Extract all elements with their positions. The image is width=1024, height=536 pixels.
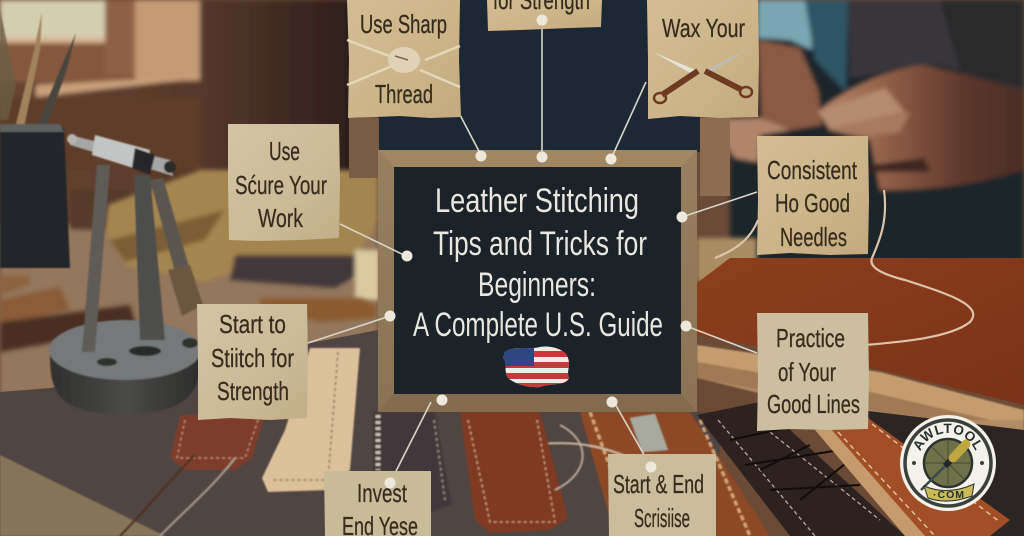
- note: consistent good needles: Consistent: [767, 155, 858, 185]
- note: practice good lines: Good Lines: [767, 389, 860, 419]
- note: start and end: Start & End: [613, 469, 704, 499]
- top right: craftsman apron, shirt and hands: [710, 0, 1024, 262]
- note: wax your: [647, 0, 759, 119]
- note: secure your work: Use: [269, 136, 300, 166]
- orange leather strip with spool: [532, 412, 770, 536]
- icon: US flag: [503, 346, 569, 388]
- note: secure your work: [228, 124, 340, 241]
- note: use sharp thread: [347, 0, 461, 118]
- pencil cup with pencils: [0, 10, 76, 268]
- note: consistent good needles: [757, 136, 869, 255]
- note: use sharp thread: Thread: [375, 79, 433, 109]
- board title: A Complete U.S. Guide: [413, 306, 663, 344]
- connector dots: [384, 14, 692, 488]
- note: start to stitch for strength: Stiitch for: [211, 343, 294, 373]
- note: invest end yese: Invest: [357, 478, 408, 508]
- blackboard surface: [394, 167, 681, 394]
- note: practice good lines: of Your: [778, 357, 836, 387]
- note: start to stitch for strength: Strength: [217, 376, 289, 406]
- logo: awltool badge: [900, 415, 996, 511]
- note: practice good lines: Practice: [776, 323, 845, 353]
- wood block on right: [697, 238, 757, 282]
- brown leather tag strip: [460, 412, 583, 533]
- gloves on table: [105, 170, 379, 300]
- note: secure your work: Work: [258, 203, 304, 233]
- large brown leather hide: [697, 258, 1024, 405]
- note: consistent good needles: Ho Good: [775, 188, 850, 218]
- chalkboard with title: [378, 150, 697, 412]
- wooden tabletop corner: [0, 455, 165, 536]
- waxed thread cord: [715, 190, 973, 345]
- note: secure your work: Sćure Your: [235, 170, 327, 200]
- note: start and end: [608, 454, 716, 536]
- wood pieces and handle: [0, 275, 376, 352]
- note: practice good lines: [757, 313, 869, 431]
- note: wax your: Wax Your: [662, 13, 745, 43]
- icon: awl: [921, 444, 966, 490]
- icon: scissors: [653, 47, 752, 103]
- wooden frame: [378, 150, 697, 412]
- background: blurred wall and window: [0, 0, 378, 415]
- note: start to stitch for strength: [197, 304, 308, 420]
- note: start and end: Scrisiise: [634, 503, 690, 533]
- brown leather tag with cords: [120, 415, 265, 536]
- note: use sharp thread: Use Sharp: [360, 9, 447, 39]
- note: for strength: [487, 0, 602, 31]
- logo: awltool badge: AWLTOOL: [914, 424, 981, 451]
- chalkboard back panel: [349, 0, 730, 196]
- right hand: [818, 65, 1024, 190]
- ribbon with .com: ·COM: [933, 489, 965, 501]
- orange stitched leather strip: [815, 418, 1010, 536]
- left hand: [758, 40, 822, 130]
- note: start to stitch for strength: Start to: [219, 309, 286, 339]
- note: consistent good needles: Needles: [780, 222, 847, 252]
- dark stitched leather strip: [697, 402, 905, 536]
- dark leather strip with white stitches: [373, 412, 452, 512]
- connector lines: [308, 26, 757, 483]
- note: invest end yese: [324, 471, 431, 536]
- desk mat: [0, 330, 720, 536]
- board title: Beginners:: [478, 266, 596, 304]
- stitching stand tool: [49, 134, 203, 414]
- board title: [413, 182, 663, 344]
- right dark corner: [860, 410, 1024, 536]
- cream leather strip: [262, 348, 360, 492]
- board title: Tips and Tricks for: [433, 225, 647, 263]
- icon: thread spool with needles: [347, 40, 460, 87]
- tan leather strips: [697, 345, 1024, 445]
- board title: Leather Stitching: [435, 182, 639, 220]
